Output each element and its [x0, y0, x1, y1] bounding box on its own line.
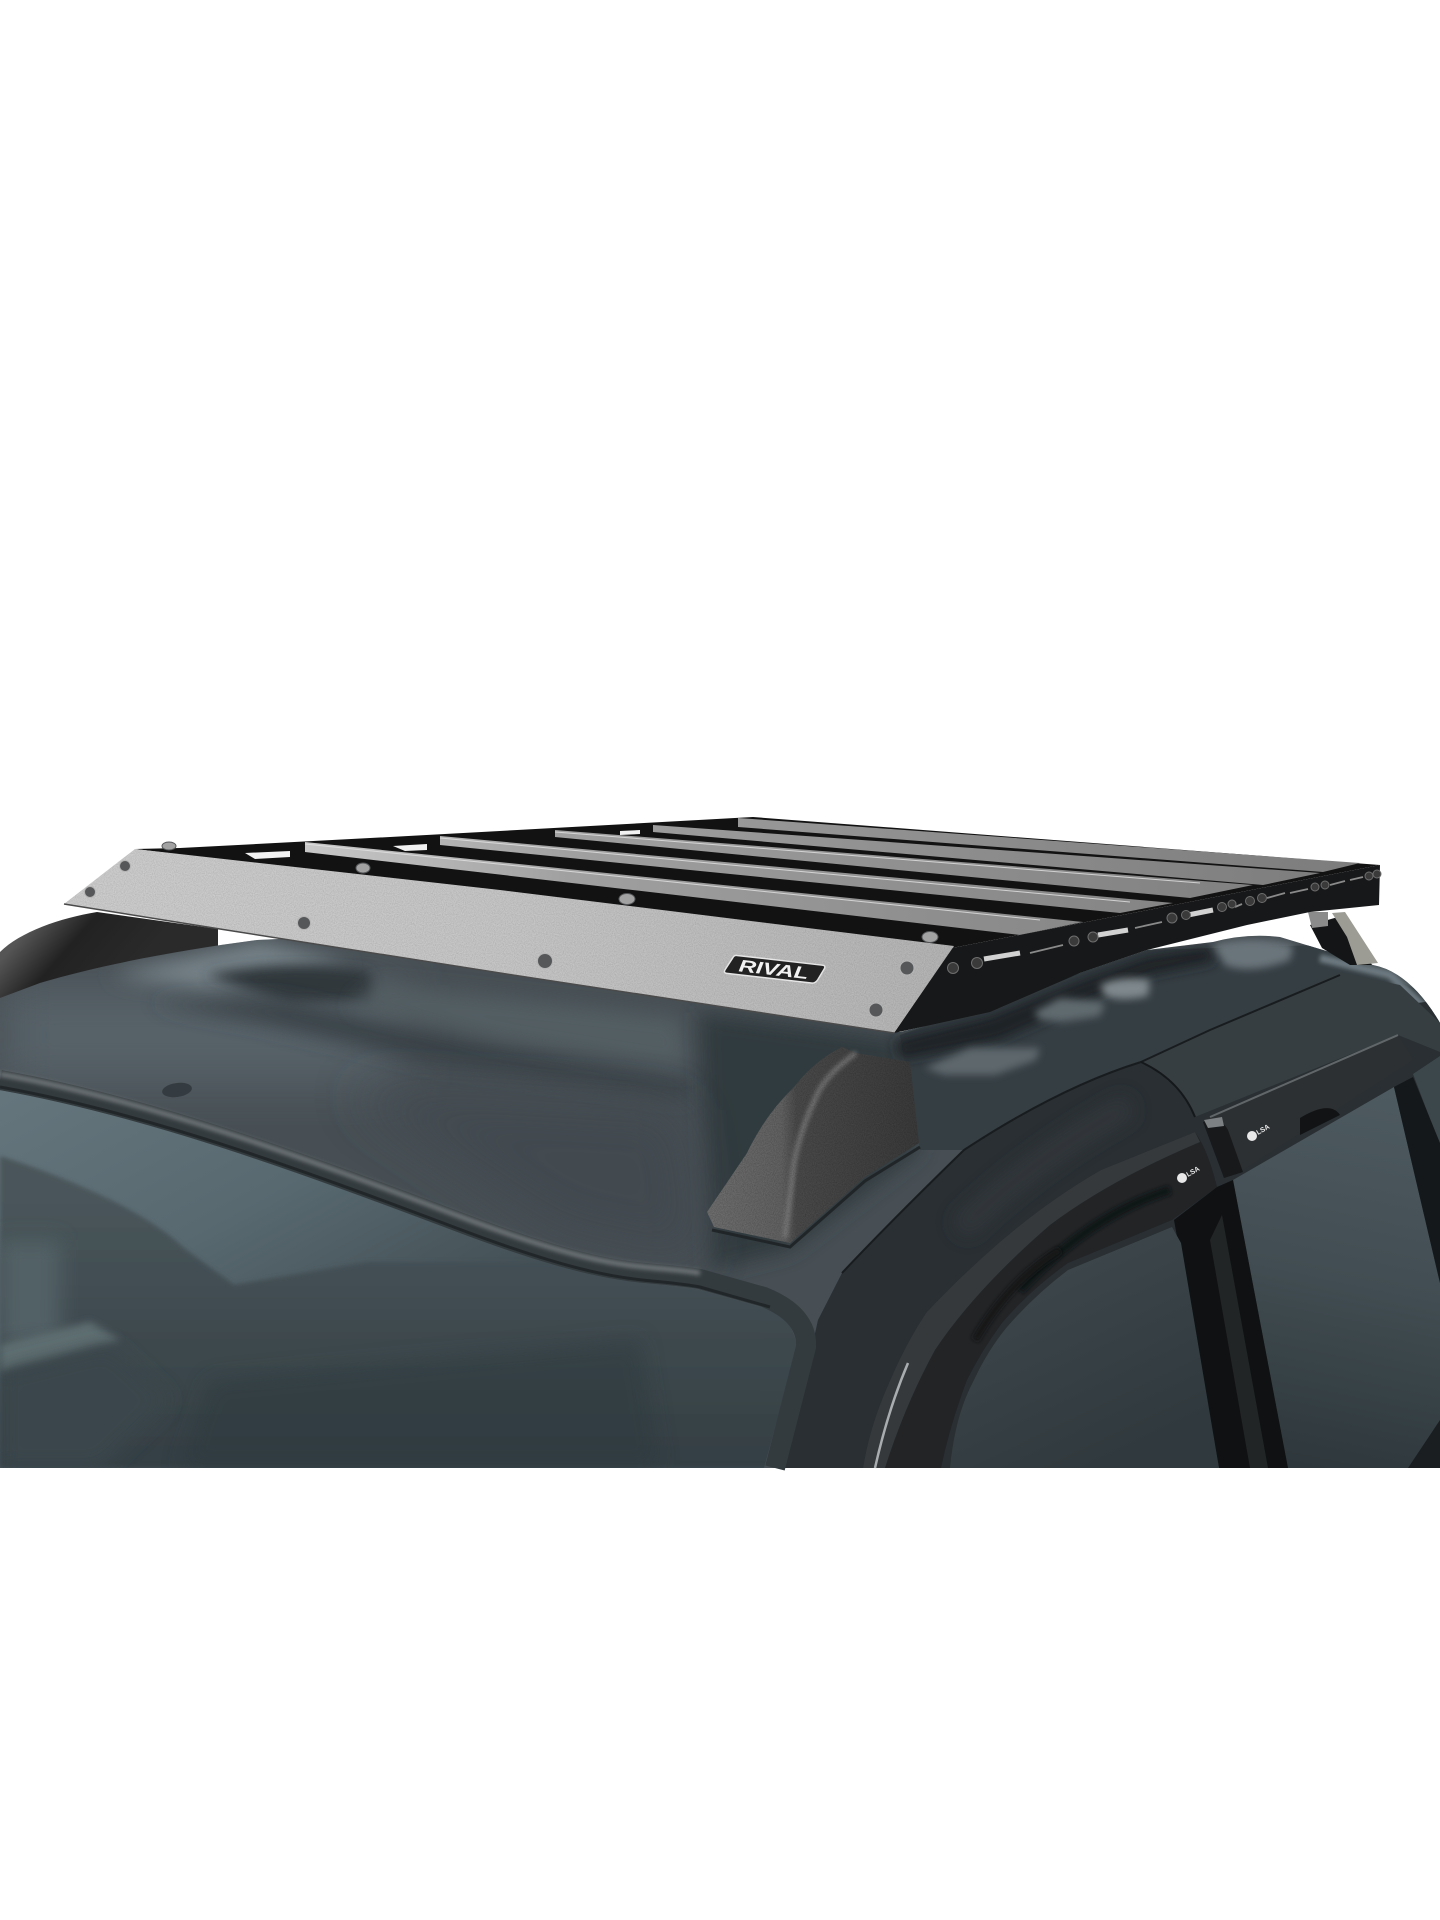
vehicle body: [0, 920, 1440, 1480]
rear window visor: [1203, 1035, 1413, 1178]
rail slots: [984, 910, 1213, 959]
plate bolts: [84, 860, 914, 1017]
rear door window: [1233, 1087, 1440, 1468]
roof rack: [135, 817, 1380, 948]
roof panel: [0, 920, 1440, 1480]
B pillar: [1174, 1180, 1288, 1468]
windshield top trim: [0, 1074, 806, 1468]
windshield reflections: [0, 1156, 800, 1468]
front door window: [950, 1227, 1219, 1468]
shadow under rack rail: [894, 946, 1215, 1060]
windshield: [0, 1090, 800, 1468]
cab side surface: [785, 1000, 1440, 1468]
frame gaps: [245, 830, 640, 859]
RIVAL badge: RIVAL: [738, 956, 809, 983]
rail bolts: [948, 870, 1381, 974]
visor brand logos: LSA: [1256, 1124, 1271, 1137]
roof plug: [161, 1081, 193, 1099]
front window visor: [863, 1132, 1217, 1468]
far side black roof rail: [0, 912, 218, 1000]
visor brand logos: [1177, 1124, 1271, 1183]
black end rail with slots: [894, 865, 1381, 1033]
slat 4: [653, 825, 1320, 885]
upper cab panel: [1141, 972, 1440, 1117]
rack black frame: [135, 817, 1380, 948]
far window: [1413, 1056, 1440, 1145]
silver wind deflector plate: [64, 842, 954, 1033]
slat 3: [555, 830, 1253, 898]
roof shading and reflections: [0, 940, 1440, 1270]
rear rack support leg: [1308, 912, 1378, 965]
slat 1: [305, 842, 1083, 935]
plate dome bolts: [162, 842, 938, 942]
rack mount foot: [707, 1047, 920, 1247]
RIVAL badge: [724, 954, 825, 985]
far door pillar: [1394, 1077, 1440, 1283]
slat 5: [738, 818, 1360, 872]
slat highlights: [305, 832, 1200, 920]
slat 2: [440, 836, 1173, 913]
product photo: roof rack on vehicle: [0, 817, 1440, 1470]
visor brand logos: LSA: [1186, 1166, 1201, 1179]
